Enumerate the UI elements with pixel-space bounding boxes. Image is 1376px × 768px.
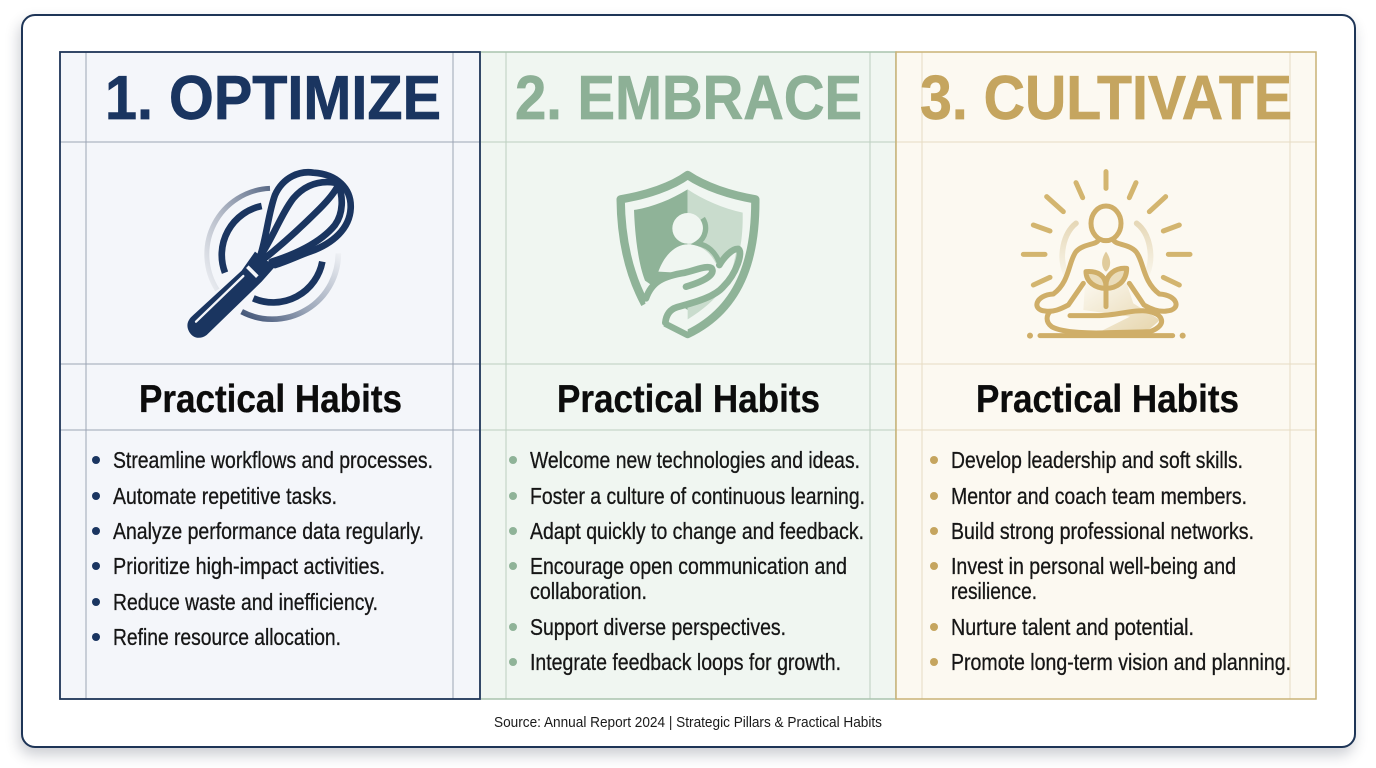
icon: whisk <box>187 172 351 338</box>
bullet list: Reduce waste and inefficiency. <box>113 589 378 615</box>
bullet list: Invest in personal well-being and <box>951 553 1236 579</box>
heading: 2. EMBRACE: 2. EMBRACE <box>515 64 862 133</box>
bullet list: Develop leadership and soft skills. <box>951 447 1243 473</box>
bullet list <box>930 447 1291 675</box>
bullet list <box>92 447 433 650</box>
bullet list: Mentor and coach team members. <box>951 483 1247 509</box>
bullet list: Encourage open communication and <box>530 553 847 579</box>
icon: shield with person and hand <box>621 175 755 334</box>
bullet list: resilience. <box>951 578 1037 604</box>
bullet list: Foster a culture of continuous learning. <box>530 483 865 509</box>
subheading: Practical Habits <box>557 378 820 421</box>
bullet list: Refine resource allocation. <box>113 624 341 650</box>
subheading: Practical Habits <box>139 378 402 421</box>
panel: cultivate <box>896 52 1316 699</box>
icon: meditating figure <box>1023 172 1190 339</box>
bullet list <box>509 447 865 675</box>
heading: 1. OPTIMIZE: 1. OPTIMIZE <box>105 64 441 133</box>
bullet list: Streamline workflows and processes. <box>113 447 433 473</box>
bullet list: Welcome new technologies and ideas. <box>530 447 860 473</box>
bullet list: Adapt quickly to change and feedback. <box>530 518 864 544</box>
bullet list: Automate repetitive tasks. <box>113 483 337 509</box>
bullet list: Nurture talent and potential. <box>951 614 1194 640</box>
bullet list: Build strong professional networks. <box>951 518 1254 544</box>
bullet list: Prioritize high-impact activities. <box>113 553 385 579</box>
panel: embrace <box>481 52 896 699</box>
bullet list: collaboration. <box>530 578 647 604</box>
bullet list: Analyze performance data regularly. <box>113 518 424 544</box>
heading: 3. CULTIVATE: 3. CULTIVATE <box>920 64 1292 133</box>
source note: Source: Annual Report 2024 | Strategic Pillars & Practical Habits <box>494 714 882 731</box>
bullet list: Support diverse perspectives. <box>530 614 786 640</box>
bullet list: Integrate feedback loops for growth. <box>530 649 841 675</box>
panel: optimize <box>60 52 480 699</box>
bullet list: Promote long-term vision and planning. <box>951 649 1291 675</box>
subheading: Practical Habits <box>976 378 1239 421</box>
